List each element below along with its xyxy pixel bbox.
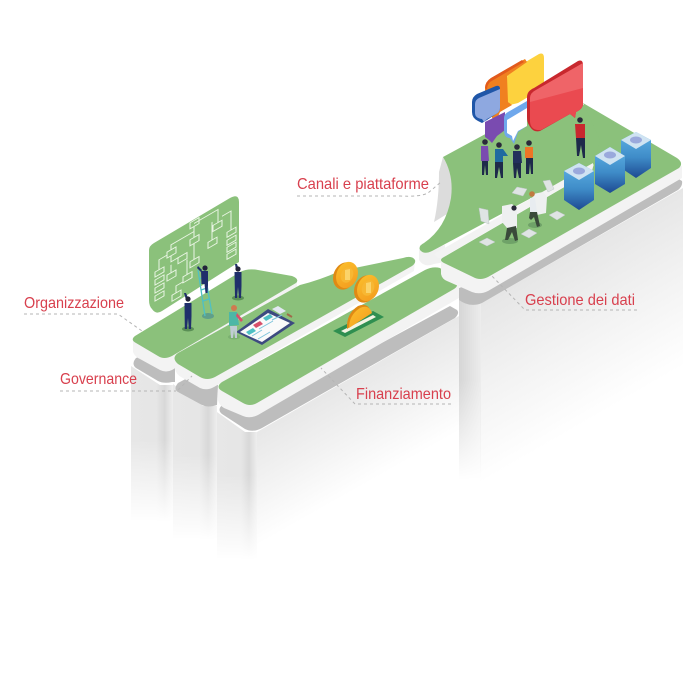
person: man orange (525, 140, 533, 174)
label: governance: Governance (60, 371, 137, 388)
label: organizzazione: Organizzazione (24, 295, 124, 312)
platform ledge: finanziamento (220, 306, 458, 431)
coin: top right (350, 272, 383, 306)
column: finanziamento (217, 316, 459, 542)
banknote slot (333, 311, 384, 337)
platform: gestione dei dati (441, 103, 681, 279)
person: man red (575, 117, 585, 158)
column: governance (173, 384, 217, 522)
platform: gestione dei dati side (441, 166, 682, 293)
speech bubble: orange (485, 59, 527, 124)
platform: canali e piattaforme (420, 92, 620, 253)
whiteboard: organisation chart (149, 196, 239, 313)
coin: top left (329, 259, 362, 293)
person: man blue (495, 142, 508, 178)
speech bubble: blue (472, 86, 500, 123)
speech bubble: yellow (507, 54, 544, 105)
platform: canali e piattaforme side (419, 157, 452, 265)
ladder (198, 268, 214, 319)
label: gestione dei dati: Gestione dei dati (525, 292, 635, 309)
server: second (595, 147, 625, 193)
clipboard checklist (236, 306, 295, 345)
platform: organizzazione (133, 269, 297, 372)
platform: finanziamento (218, 267, 459, 417)
leader: governance (60, 376, 192, 391)
papers scattered (479, 180, 565, 246)
person: worker carrying printer left (502, 204, 518, 244)
speech bubble: purple (485, 112, 505, 143)
leader: canali e piattaforme (297, 182, 441, 196)
label: finanziamento: Finanziamento (356, 386, 451, 403)
person: woman purple (481, 139, 489, 175)
platform ledge: gestione dei dati (459, 178, 682, 305)
server: first (564, 163, 594, 210)
person: man on ladder (197, 265, 208, 293)
platform: governance (174, 257, 415, 389)
speech bubble: red (527, 60, 583, 131)
label: canali e piattaforme: Canali e piattaforme (297, 176, 429, 193)
server: third (621, 132, 651, 178)
person: man left (182, 293, 194, 332)
leader: finanziamento (321, 368, 451, 404)
channel: white divider (434, 163, 593, 258)
column: organizzazione (131, 366, 173, 504)
person: woman with teal top (228, 305, 243, 340)
coin: dropping in slot (347, 305, 372, 329)
leader: organizzazione (24, 314, 142, 331)
speech bubble: white and blue (504, 101, 527, 144)
person: man right (232, 264, 244, 300)
person: worker carrying printer right (528, 191, 547, 228)
leader: gestione dei dati (490, 274, 637, 310)
platform ledge: organizzazione (134, 353, 175, 383)
column: gestione dei dati (459, 188, 683, 459)
person: man dark (513, 144, 522, 178)
platform ledge: governance (176, 374, 218, 406)
